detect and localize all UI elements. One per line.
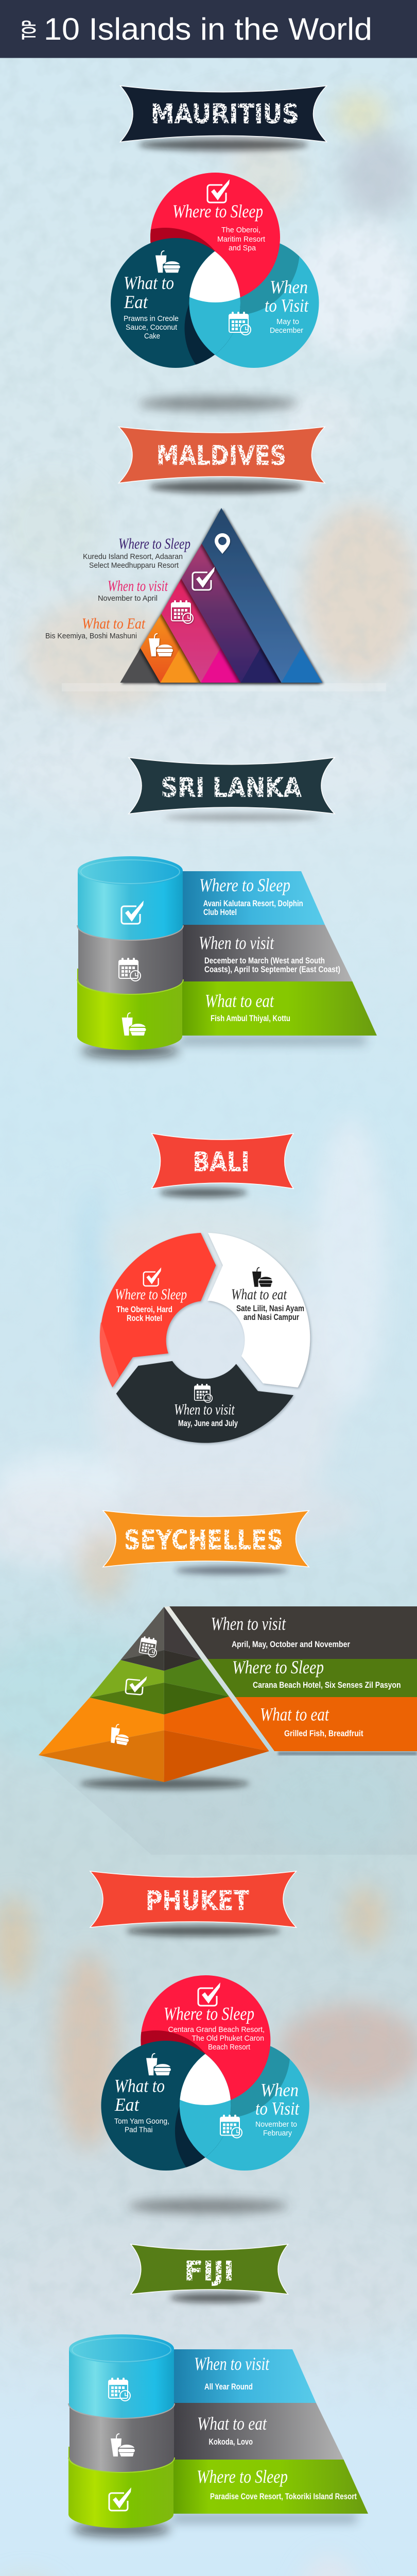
when to visit text: May, June and July bbox=[178, 1418, 238, 1428]
what to eat text: Eat bbox=[114, 2094, 140, 2115]
what to eat text bbox=[197, 2413, 267, 2447]
when to visit text bbox=[98, 578, 168, 603]
when to visit text bbox=[194, 2353, 270, 2392]
when to visit text bbox=[211, 1613, 350, 1649]
banner: Fiji bbox=[131, 2244, 288, 2302]
banner: Maldives bbox=[118, 427, 325, 493]
what to eat text bbox=[205, 991, 290, 1023]
section: Fiji bbox=[68, 2244, 368, 2536]
when to visit text: November to April bbox=[98, 594, 158, 603]
title header bar bbox=[0, 0, 417, 58]
pyramid diagram: Seychelles bbox=[39, 1606, 417, 1855]
where to sleep text: Avani Kalutara Resort, Dolphin bbox=[203, 899, 303, 908]
when to visit text: When bbox=[260, 2080, 299, 2100]
what to eat text bbox=[231, 1286, 304, 1322]
what to eat text: Prawns in Creole bbox=[124, 314, 179, 323]
when to visit text: May to bbox=[276, 317, 299, 326]
what to eat text: What to eat bbox=[205, 991, 274, 1011]
icon: calendar bbox=[195, 1384, 212, 1402]
where to sleep text: Maritim Resort bbox=[217, 235, 266, 244]
where to sleep text bbox=[115, 1286, 187, 1323]
icon: calendar bbox=[229, 312, 251, 335]
where to sleep text: Where to Sleep bbox=[118, 535, 190, 552]
icon: calendar bbox=[138, 1636, 159, 1657]
venn diagram: Phuket bbox=[91, 1975, 309, 2213]
what to eat text: Sate Lilit, Nasi Ayam bbox=[236, 1303, 304, 1313]
when to visit text: When to visit bbox=[174, 1401, 235, 1418]
where to sleep text: Where to Sleep bbox=[164, 2003, 254, 2024]
ring diagram: Bali bbox=[100, 1233, 310, 1443]
when to visit text: When to visit bbox=[211, 1613, 286, 1634]
icon: food bbox=[122, 1013, 146, 1036]
where to sleep text: Where to Sleep bbox=[199, 875, 290, 895]
when to visit text: All Year Round bbox=[204, 2382, 253, 2392]
section: Bali bbox=[100, 1133, 310, 1443]
where to sleep text: Club Hotel bbox=[203, 907, 237, 917]
what to eat text: Kokoda, Lovo bbox=[209, 2437, 253, 2447]
when to visit text: November to bbox=[255, 2120, 297, 2129]
banner: Sri Lanka bbox=[129, 757, 335, 821]
icon: food bbox=[252, 1267, 272, 1287]
where to sleep text: Rock Hotel bbox=[127, 1313, 162, 1323]
banner: Mauritius bbox=[120, 86, 326, 150]
what to eat text: Cake bbox=[144, 332, 160, 341]
when to visit text: When to visit bbox=[199, 933, 274, 953]
where to sleep text: Centara Grand Beach Resort, bbox=[168, 2025, 265, 2034]
where to sleep text: Where to Sleep bbox=[197, 2466, 288, 2487]
where to sleep text: The Oberoi, Hard bbox=[116, 1304, 172, 1314]
what to eat text bbox=[124, 273, 179, 341]
what to eat text: Fish Ambul Thiyal, Kottu bbox=[211, 1013, 290, 1023]
icon: pin bbox=[215, 533, 230, 554]
banner: Phuket bbox=[90, 1871, 297, 1936]
when to visit text: to Visit bbox=[255, 2098, 300, 2119]
where to sleep text: Kuredu Island Resort, Adaaran bbox=[83, 552, 183, 561]
what to eat text bbox=[45, 615, 146, 640]
icon: check bbox=[121, 901, 144, 924]
icon: food bbox=[155, 251, 180, 273]
where to sleep text bbox=[172, 201, 266, 252]
icon: food bbox=[109, 1723, 131, 1745]
what to eat text: What to bbox=[114, 2076, 165, 2096]
icon: calendar bbox=[220, 2114, 242, 2138]
when to visit text bbox=[199, 933, 340, 974]
what to eat text: Grilled Fish, Breadfruit bbox=[284, 1728, 363, 1738]
banner: Bali bbox=[151, 1133, 293, 1197]
banner: Phuket: PHUKET bbox=[146, 1886, 249, 1917]
title header bar: TOP bbox=[19, 20, 40, 40]
section: Mauritius bbox=[100, 86, 326, 411]
where to sleep text: Beach Resort bbox=[208, 2043, 251, 2052]
what to eat text: Tom Yam Goong, bbox=[114, 2117, 169, 2126]
banner: Seychelles bbox=[103, 1511, 309, 1574]
banner: Mauritius: MAURITIUS bbox=[151, 99, 299, 130]
where to sleep text: The Oberoi, bbox=[221, 226, 260, 234]
venn diagram: Mauritius bbox=[100, 173, 319, 411]
where to sleep text: Where to Sleep bbox=[232, 1657, 324, 1677]
when to visit text: Coasts), April to September (East Coast) bbox=[204, 964, 340, 974]
when to visit text bbox=[265, 277, 309, 335]
when to visit text: When to visit bbox=[194, 2353, 270, 2374]
section: Sri Lanka bbox=[77, 757, 377, 1058]
when to visit text: to Visit bbox=[265, 295, 309, 316]
icon: food bbox=[111, 2434, 135, 2456]
where to sleep text: and Spa bbox=[229, 244, 256, 252]
cylinder diagram: Fiji bbox=[68, 2334, 368, 2536]
where to sleep text bbox=[199, 875, 303, 917]
when to visit text bbox=[255, 2080, 300, 2138]
what to eat text: Pad Thai bbox=[125, 2126, 152, 2134]
what to eat text bbox=[114, 2076, 169, 2134]
banner: Bali: BALI bbox=[193, 1147, 249, 1178]
icon: check bbox=[126, 1674, 147, 1695]
icon: calendar bbox=[119, 958, 141, 981]
when to visit text: When bbox=[270, 277, 308, 297]
where to sleep text: The Old Phuket Caron bbox=[192, 2034, 264, 2043]
section: Seychelles bbox=[39, 1511, 417, 1855]
when to visit text: When to visit bbox=[108, 578, 168, 595]
where to sleep text: Select Meedhupparu Resort bbox=[89, 561, 179, 570]
what to eat text: What to Eat bbox=[82, 615, 146, 632]
what to eat text: What to eat bbox=[197, 2413, 267, 2434]
what to eat text: Bis Keemiya, Boshi Mashuni bbox=[45, 632, 137, 640]
where to sleep text: Paradise Cove Resort, Tokoriki Island Resort bbox=[210, 2492, 357, 2501]
section: Phuket bbox=[90, 1871, 309, 2213]
when to visit text: April, May, October and November bbox=[232, 1639, 350, 1649]
where to sleep text bbox=[83, 535, 190, 570]
banner: Fiji: FIJI bbox=[184, 2256, 234, 2287]
when to visit text: December to March (West and South bbox=[204, 956, 325, 965]
where to sleep text: Where to Sleep bbox=[172, 201, 263, 222]
where to sleep text bbox=[232, 1657, 401, 1690]
icon: calendar bbox=[171, 600, 193, 623]
when to visit text: December bbox=[270, 326, 303, 335]
icon: check bbox=[193, 567, 215, 590]
when to visit text: February bbox=[263, 2129, 292, 2138]
what to eat text: What to eat bbox=[260, 1704, 329, 1725]
icon: check bbox=[198, 1982, 220, 2006]
what to eat text: Sauce, Coconut bbox=[126, 323, 178, 332]
what to eat text: Eat bbox=[124, 292, 148, 312]
when to visit text bbox=[174, 1401, 238, 1428]
icon: check bbox=[207, 179, 230, 202]
icon: calendar bbox=[109, 2378, 130, 2401]
what to eat text: What to eat bbox=[231, 1286, 287, 1303]
where to sleep text bbox=[197, 2466, 357, 2501]
triangle diagram: Maldives bbox=[62, 508, 386, 691]
icon: check bbox=[144, 1267, 161, 1286]
what to eat text: What to bbox=[124, 273, 174, 293]
where to sleep text bbox=[164, 2003, 265, 2052]
what to eat text bbox=[260, 1704, 363, 1738]
banner: Maldives: MALDIVES bbox=[157, 440, 286, 471]
where to sleep text: Where to Sleep bbox=[115, 1286, 187, 1303]
section: Maldives bbox=[45, 427, 386, 691]
title header bar: 10 Islands in the World bbox=[44, 12, 372, 46]
icon: food bbox=[146, 2054, 171, 2075]
icon: food bbox=[149, 634, 173, 656]
icon: check bbox=[109, 2487, 131, 2511]
banner: Seychelles: SEYCHELLES bbox=[124, 1525, 283, 1556]
cylinder diagram: Sri Lanka bbox=[77, 856, 377, 1058]
what to eat text: and Nasi Campur bbox=[244, 1312, 299, 1322]
banner: Sri Lanka: SRI LANKA bbox=[161, 773, 302, 804]
